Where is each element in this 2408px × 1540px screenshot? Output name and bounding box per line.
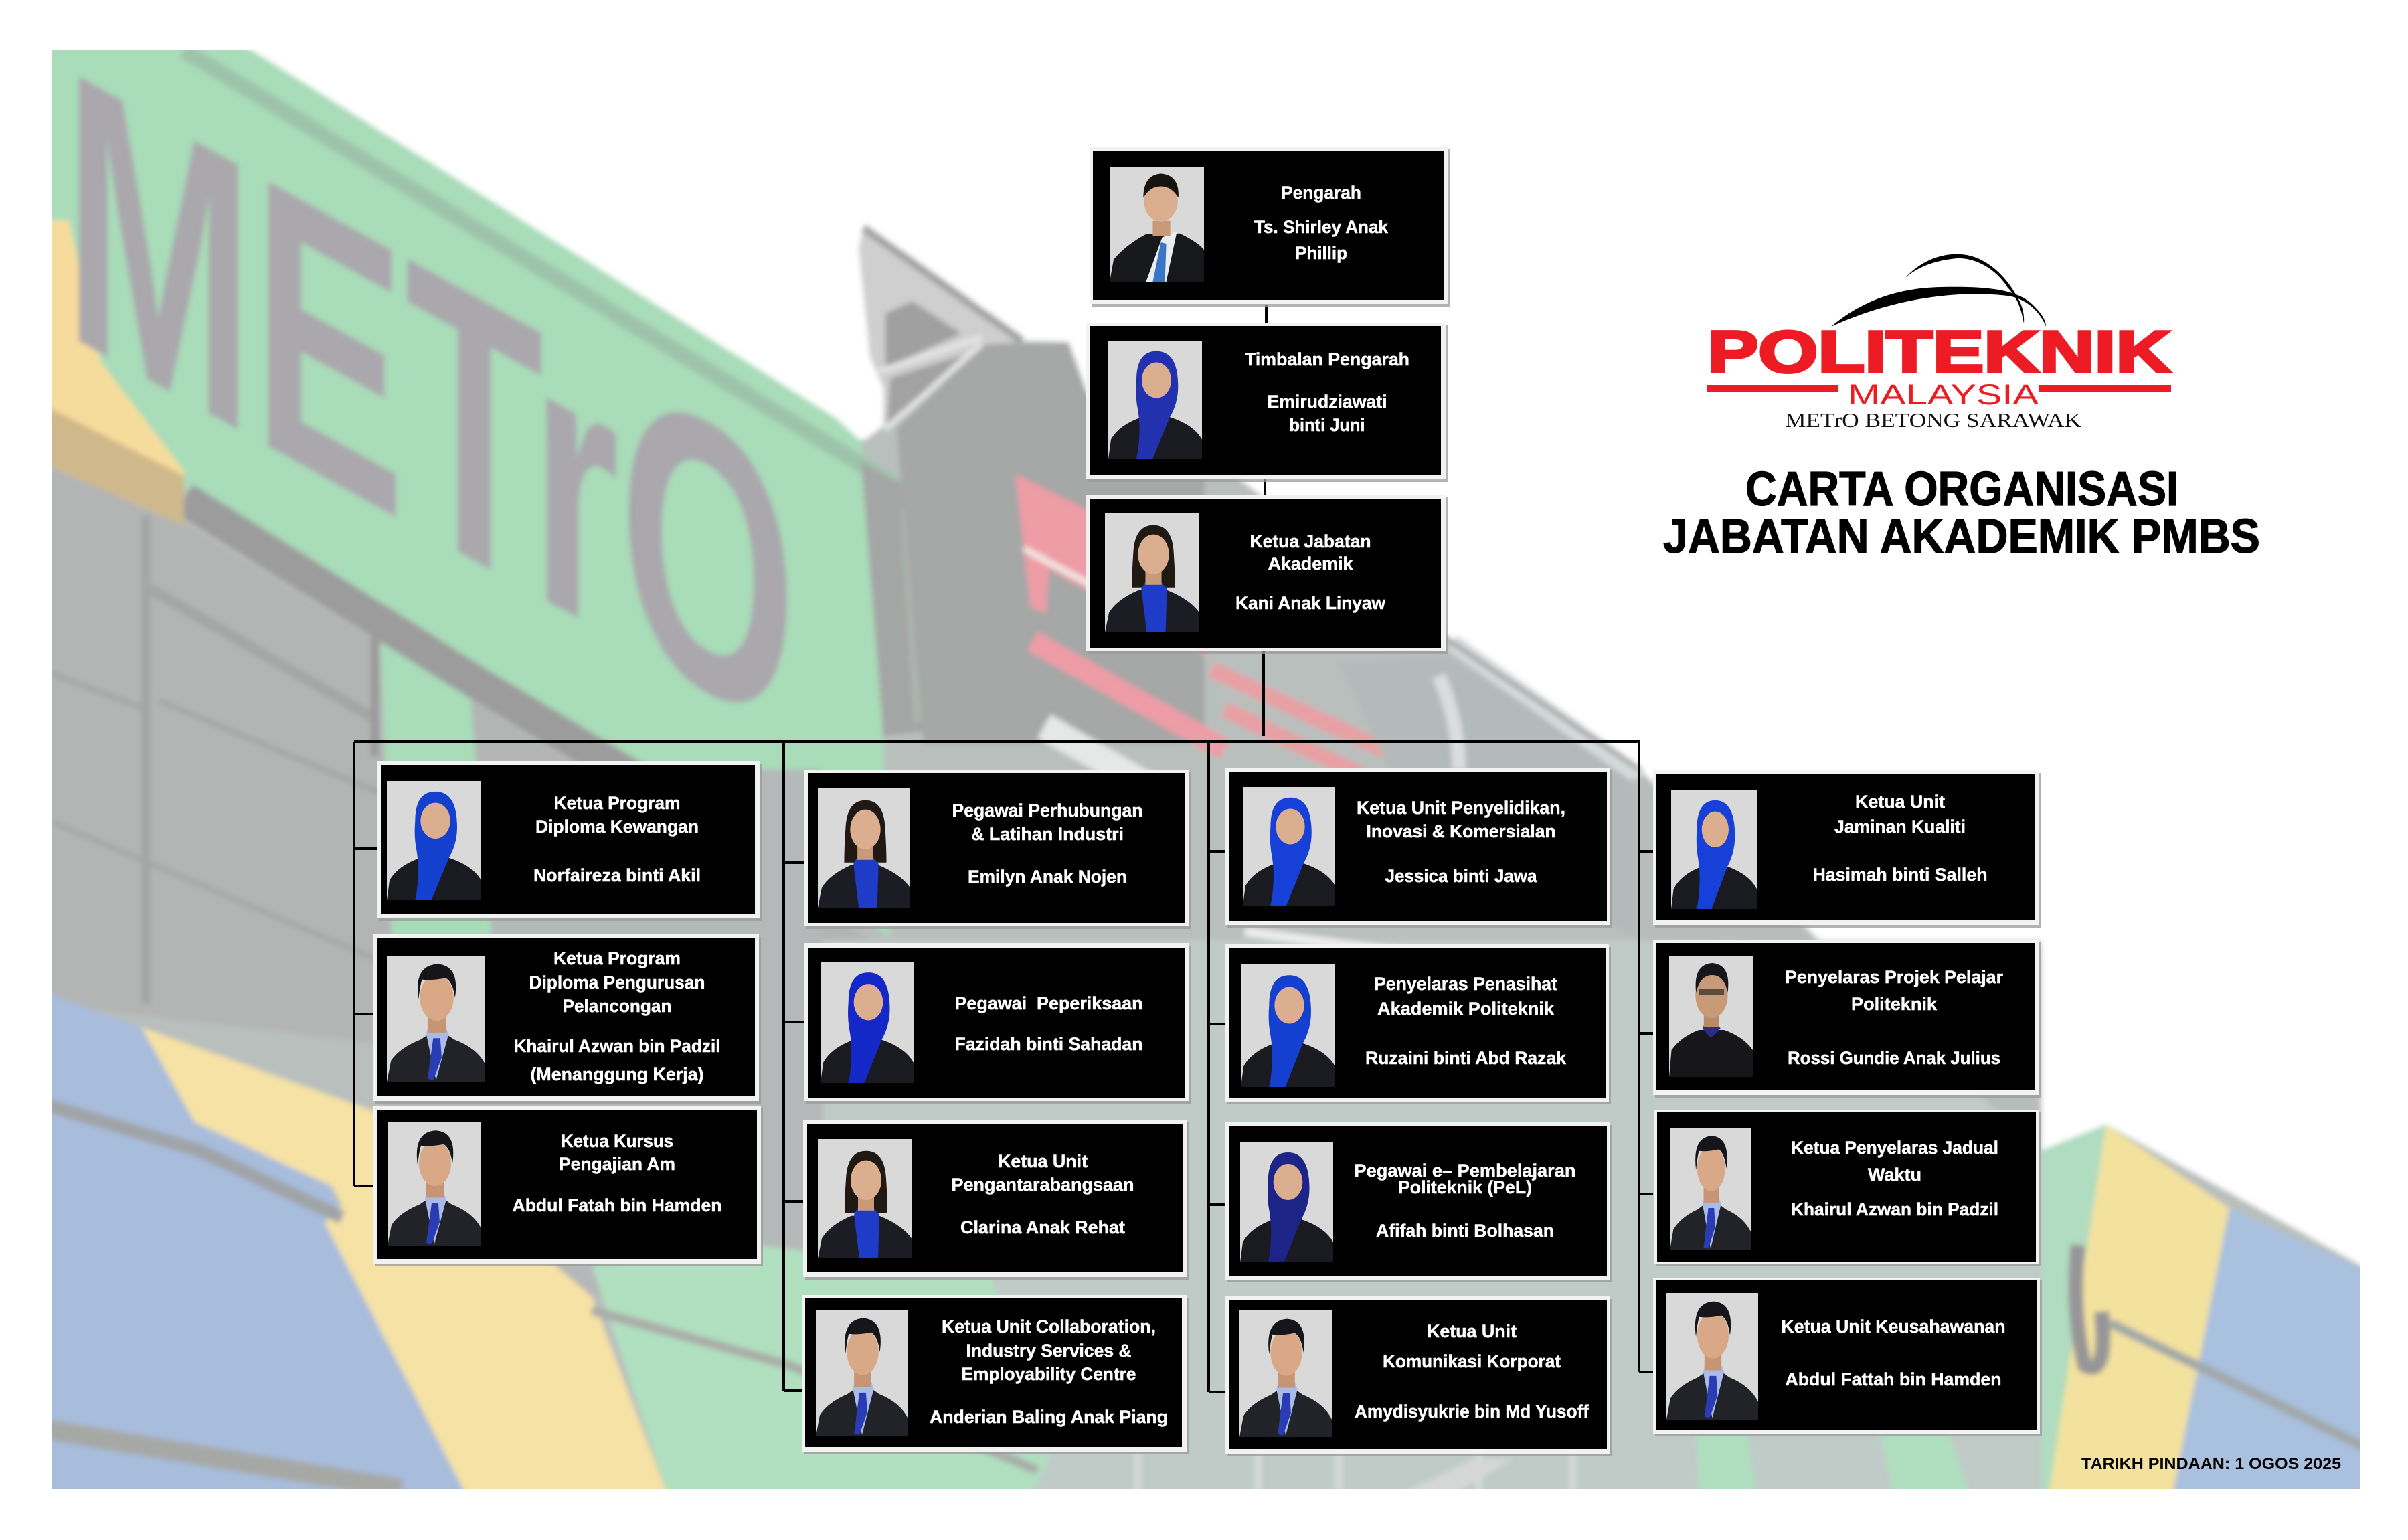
panel: Ketua Unit Collaboration: Employability Centre bbox=[961, 1364, 1136, 1384]
panel: Penyelaras Penasihat Akademik: Penyelaras Penasihat bbox=[1374, 974, 1557, 994]
panel: Ketua Penyelaras Jadual Waktu: Khairul Azwan bin Padzil bbox=[1791, 1199, 1998, 1219]
footer: revision date: TARIKH PINDAAN: 1 OGOS 2025 bbox=[2081, 1455, 2341, 1473]
panel: Ketua Jabatan Akademik bbox=[1086, 495, 1448, 654]
photo: Khairul Azwan bbox=[1670, 1128, 1751, 1250]
panel: Ketua Unit Pengantarabangsaan: Pengantarabangsaan bbox=[952, 1175, 1134, 1195]
panel: Pegawai Perhubungan & Latihan Industri: Pegawai Perhubungan bbox=[952, 800, 1143, 821]
panel: Pegawai Peperiksaan bbox=[804, 943, 1191, 1104]
panel: Ketua Unit Collaboration: Industry Services & bbox=[966, 1341, 1131, 1361]
panel: Ketua Program Diploma Kewangan bbox=[377, 761, 762, 921]
panel: Ketua Jabatan Akademik: Ketua Jabatan bbox=[1250, 531, 1371, 551]
panel: Pegawai Peperiksaan: Fazidah binti Sahadan bbox=[954, 1034, 1143, 1054]
logo: Politeknik Malaysia bbox=[1707, 254, 2171, 432]
photo: Anderian bbox=[816, 1310, 908, 1436]
panel: Ketua Kursus Pengajian Am bbox=[373, 1106, 763, 1266]
panel: Ketua Kursus Pengajian Am: Ketua Kursus bbox=[561, 1131, 673, 1151]
logo: Politeknik Malaysia: MALAYSIA bbox=[1848, 379, 2039, 411]
panel: Ketua Program Diploma Pengurusan Pelancongan: Ketua Program bbox=[553, 948, 681, 968]
photo: Fazidah bbox=[821, 962, 914, 1083]
panel: Ketua Unit Komunikasi Korporat: Amydisyukrie bin Md Yusoff bbox=[1355, 1401, 1589, 1422]
logo: Politeknik Malaysia: METrO BETONG SARAWAK bbox=[1785, 408, 2082, 432]
panel: Ketua Program Diploma Pengurusan Pelancongan: Diploma Pengurusan bbox=[529, 972, 705, 993]
panel: Ketua Unit Keusahawanan: Ketua Unit Keusahawanan bbox=[1782, 1316, 2005, 1337]
panel: Pegawai Perhubungan & Latihan Industri bbox=[804, 770, 1191, 929]
photo: Jessica bbox=[1243, 787, 1335, 906]
panel: Ketua Penyelaras Jadual Waktu: Ketua Penyelaras Jadual bbox=[1791, 1138, 1998, 1158]
photo: Emirudziawati bbox=[1108, 341, 1202, 459]
panel: Ketua Program Diploma Kewangan: Ketua Program bbox=[554, 793, 680, 813]
panel: Ketua Unit Jaminan Kualiti bbox=[1653, 770, 2041, 928]
panel: Timbalan Pengarah: Emirudziawati bbox=[1268, 392, 1387, 412]
connector: branch lines bbox=[354, 742, 1653, 1392]
panel: Penyelaras Projek Pelajar: Politeknik bbox=[1851, 994, 1938, 1014]
panel: Ketua Unit Keusahawanan: Abdul Fattah bin Hamden bbox=[1786, 1369, 2001, 1389]
logo: Politeknik Malaysia: POLITEKNIK bbox=[1707, 319, 2171, 385]
panel: Penyelaras Projek Pelajar bbox=[1653, 940, 2041, 1098]
panel: Timbalan Pengarah bbox=[1086, 323, 1448, 482]
photo: Emilyn bbox=[818, 788, 910, 908]
panel: Ketua Program Diploma Kewangan: Norfaireza binti Akil bbox=[533, 865, 701, 885]
panel: Ketua Penyelaras Jadual Waktu: Waktu bbox=[1868, 1165, 1921, 1185]
panel: Ketua Unit Collaboration bbox=[802, 1295, 1189, 1454]
panel: Ketua Unit Jaminan Kualiti: Ketua Unit bbox=[1855, 792, 1945, 812]
panel: Ketua Unit Pengantarabangsaan: Ketua Unit bbox=[998, 1151, 1088, 1171]
photo: Ruzaini bbox=[1241, 964, 1335, 1087]
photo: Abdul Fattah bbox=[1666, 1293, 1758, 1420]
panel: Pegawai Perhubungan & Latihan Industri: & Latihan Industri bbox=[971, 824, 1124, 844]
photo: Abdul Fatah bbox=[388, 1122, 481, 1246]
panel: Pengarah: Pengarah bbox=[1281, 183, 1361, 203]
panel: Ketua Unit Jaminan Kualiti: Hasimah binti Salleh bbox=[1812, 865, 1988, 885]
panel: Ketua Unit Pengantarabangsaan bbox=[803, 1120, 1189, 1280]
panel: Pegawai Perhubungan & Latihan Industri: Emilyn Anak Nojen bbox=[968, 867, 1127, 887]
panel: Ketua Program Diploma Pengurusan Pelancongan: (Menanggung Kerja) bbox=[530, 1064, 704, 1084]
panel: Pengarah: Phillip bbox=[1295, 243, 1347, 263]
panel: Penyelaras Projek Pelajar: Rossi Gundie Anak Julius bbox=[1788, 1048, 2000, 1068]
photo: Khairul bbox=[387, 956, 485, 1082]
panel: Penyelaras Penasihat Akademik: Akademik Politeknik bbox=[1377, 999, 1555, 1019]
photo: Kani bbox=[1105, 513, 1199, 632]
panel: Timbalan Pengarah: Timbalan Pengarah bbox=[1245, 349, 1409, 369]
panel: Penyelaras Projek Pelajar: Penyelaras Projek Pelajar bbox=[1785, 967, 2003, 987]
panel: Penyelaras Penasihat Akademik bbox=[1225, 944, 1611, 1104]
panel: Ketua Unit Jaminan Kualiti: Jaminan Kualiti bbox=[1834, 817, 1966, 837]
panel: Ketua Unit Penyelidikan: Ketua Unit Penyelidikan, bbox=[1357, 798, 1565, 818]
panel: Ketua Unit Penyelidikan: Jessica binti Jawa bbox=[1385, 866, 1537, 886]
panel: Ketua Unit Keusahawanan bbox=[1653, 1278, 2042, 1436]
photo: Rossi bbox=[1669, 956, 1753, 1077]
title bbox=[1663, 462, 2260, 564]
panel: Ketua Program Diploma Pengurusan Pelancongan bbox=[373, 934, 761, 1104]
panel: Ketua Program Diploma Kewangan: Diploma Kewangan bbox=[535, 817, 699, 837]
photo: Afifah bbox=[1240, 1142, 1333, 1262]
panel: Ketua Program Diploma Pengurusan Pelancongan: Pelancongan bbox=[562, 996, 672, 1016]
panel: Pegawai Peperiksaan: Pegawai Peperiksaan bbox=[954, 993, 1143, 1013]
panel: Timbalan Pengarah: binti Juni bbox=[1289, 415, 1365, 435]
panel: Ketua Unit Penyelidikan bbox=[1225, 768, 1612, 928]
title: CARTA ORGANISASI bbox=[1745, 462, 2178, 516]
title: JABATAN AKADEMIK PMBS bbox=[1663, 510, 2260, 564]
panel: Ketua Penyelaras Jadual Waktu bbox=[1654, 1110, 2041, 1266]
panel: Ketua Unit Komunikasi Korporat bbox=[1225, 1296, 1612, 1456]
panel: Ketua Jabatan Akademik: Akademik bbox=[1268, 553, 1353, 574]
connector: top reporting line bbox=[1264, 305, 1266, 736]
panel: Pegawai e-Pembelajaran bbox=[1225, 1122, 1612, 1282]
panel: Ketua Kursus Pengajian Am: Pengajian Am bbox=[559, 1154, 675, 1174]
panel: Ketua Unit Komunikasi Korporat: Komunikasi Korporat bbox=[1383, 1351, 1561, 1371]
photo: Clarina bbox=[818, 1139, 912, 1258]
panel: Ketua Unit Collaboration: Anderian Baling Anak Piang bbox=[930, 1407, 1168, 1427]
panel: Pegawai e-Pembelajaran: Afifah binti Bolhasan bbox=[1376, 1221, 1554, 1241]
photo: Norfaireza bbox=[387, 781, 481, 900]
panel: Penyelaras Penasihat Akademik: Ruzaini binti Abd Razak bbox=[1365, 1048, 1567, 1068]
panel: Ketua Kursus Pengajian Am: Abdul Fatah bin Hamden bbox=[513, 1195, 721, 1215]
panel: Ketua Jabatan Akademik: Kani Anak Linyaw bbox=[1235, 593, 1386, 613]
panel: Ketua Program Diploma Pengurusan Pelancongan: Khairul Azwan bin Padzil bbox=[514, 1036, 720, 1056]
panel: Pengarah: Ts. Shirley Anak bbox=[1254, 217, 1389, 237]
panel: Pegawai e-Pembelajaran: Politeknik (PeL) bbox=[1398, 1177, 1532, 1197]
panel: Ketua Unit Collaboration: Ketua Unit Collaboration, bbox=[942, 1316, 1156, 1337]
photo: Amydisyukrie bbox=[1239, 1310, 1332, 1437]
photo: Hasimah bbox=[1671, 790, 1757, 909]
panel: Pegawai e-Pembelajaran: Pegawai e– Pembelajaran bbox=[1355, 1161, 1575, 1181]
panel: Ketua Unit Penyelidikan: Inovasi & Komersialan bbox=[1367, 821, 1555, 841]
panel: Ketua Unit Komunikasi Korporat: Ketua Unit bbox=[1427, 1321, 1517, 1341]
background photo: blurred building: METrO bbox=[64, 0, 796, 821]
panel: Pengarah bbox=[1090, 147, 1450, 307]
panel: Ketua Unit Pengantarabangsaan: Clarina Anak Rehat bbox=[960, 1217, 1125, 1237]
photo: Shirley bbox=[1110, 167, 1204, 282]
